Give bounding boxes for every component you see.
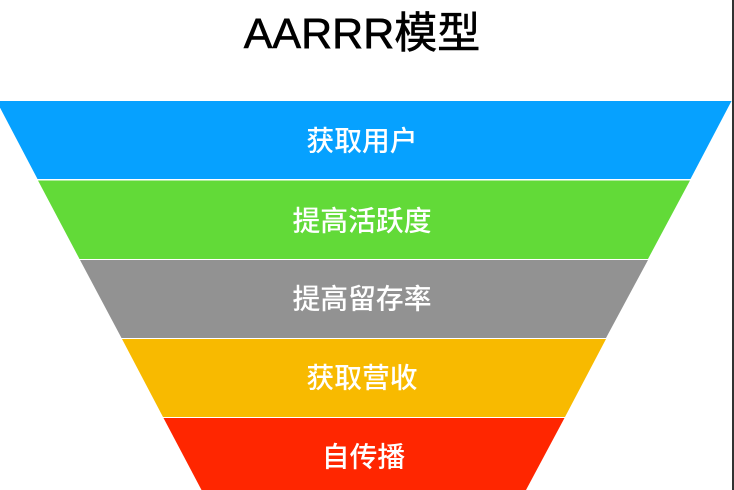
funnel xyxy=(0,101,732,490)
funnel tier: revenue xyxy=(122,339,606,417)
funnel tier: activation: 提高活跃度 xyxy=(292,206,432,236)
window edge xyxy=(732,0,734,490)
funnel tier: referral xyxy=(164,418,564,490)
funnel tier: acquisition xyxy=(0,101,732,179)
funnel tier: retention xyxy=(80,260,648,338)
funnel tier: referral: 自传播 xyxy=(322,442,405,472)
funnel tier: activation xyxy=(38,180,690,259)
title: AARRR模型 xyxy=(244,10,480,58)
funnel tier: acquisition: 获取用户 xyxy=(306,126,418,156)
funnel tier: retention: 提高留存率 xyxy=(292,284,432,314)
funnel tier: revenue: 获取营收 xyxy=(306,362,418,394)
